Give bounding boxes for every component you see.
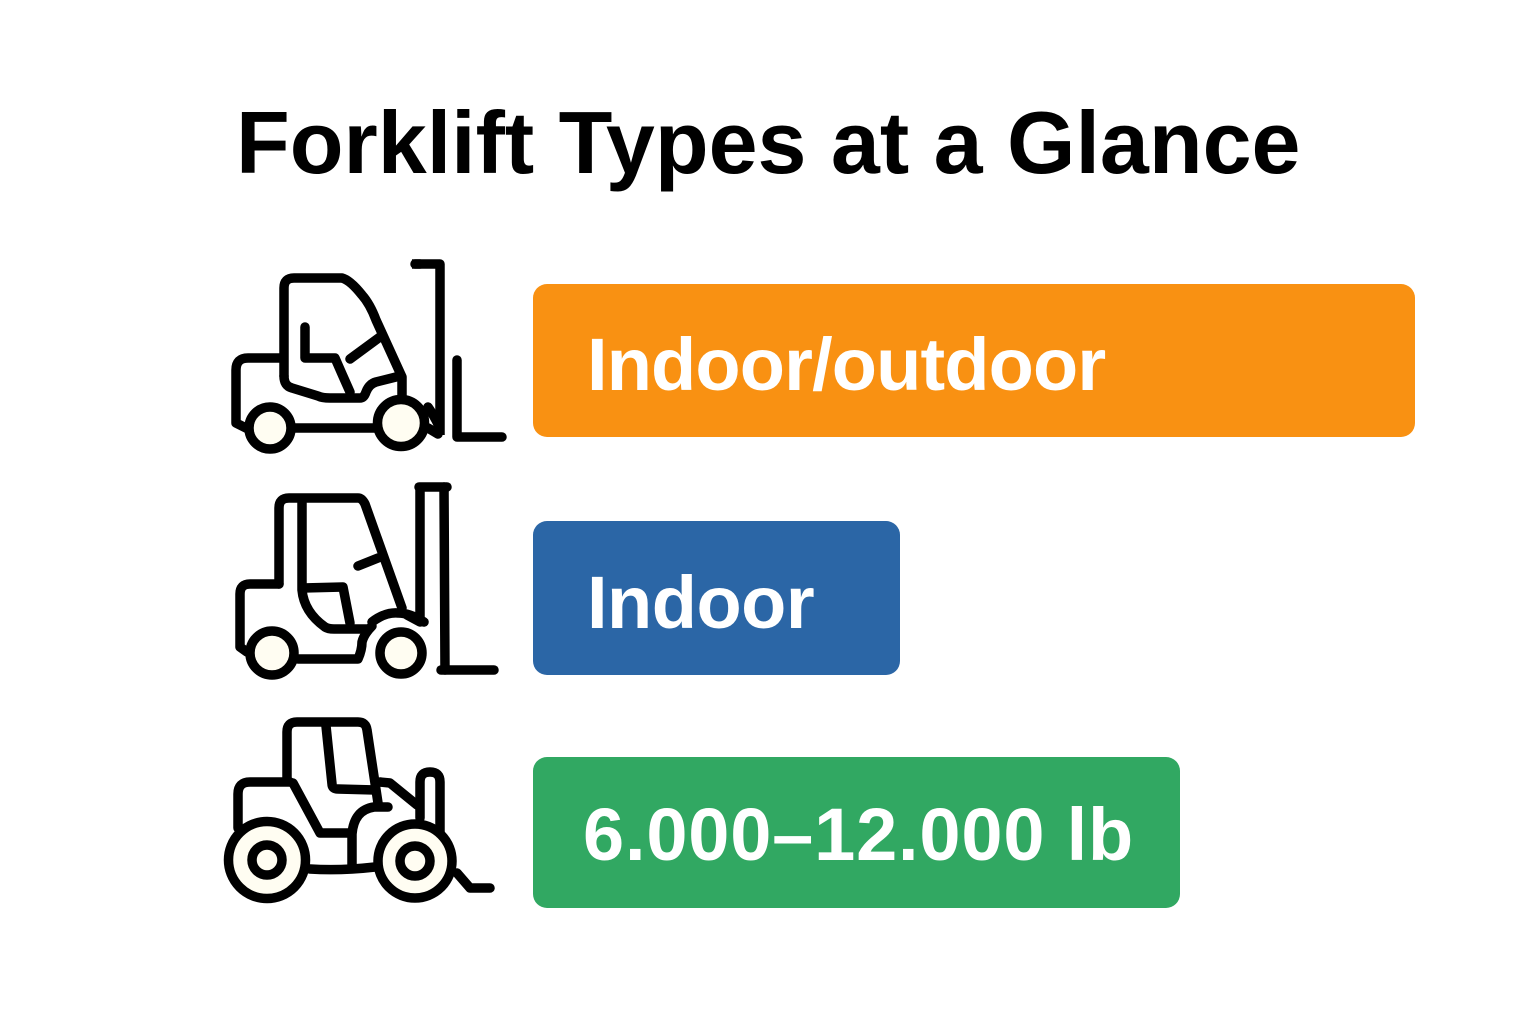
bar: indoor [533,521,900,675]
bar: indoor: Indoor [587,561,814,644]
bar: weight capacity: 6.000–12.000 lb [583,793,1134,876]
icon: forklift 3 [224,717,495,904]
bar: weight capacity [533,757,1180,908]
bar: indoor/outdoor: Indoor/outdoor [587,323,1105,406]
icon: forklift 2 [235,482,499,680]
icon: forklift 1 [231,259,507,454]
bar: indoor/outdoor [533,284,1415,437]
title: Forklift Types at a Glance [236,93,1300,192]
